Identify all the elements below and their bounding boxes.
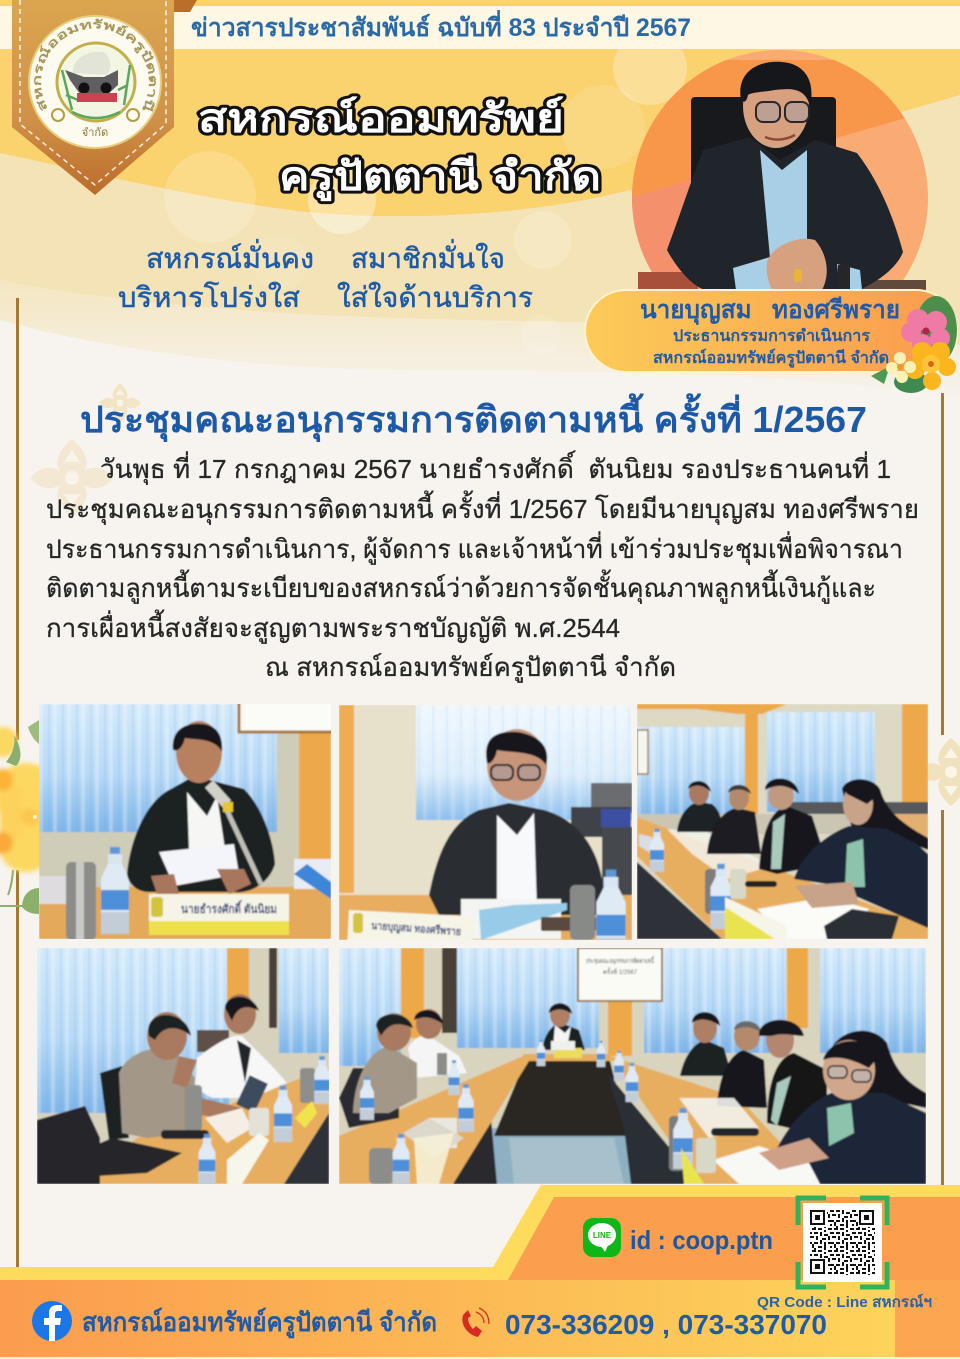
- icon: LINE: LINE: [593, 1231, 612, 1240]
- floor and centre table front: [439, 1061, 700, 1184]
- decorative bubbles: [164, 31, 687, 355]
- QR caption: QR Code : Line สหกรณ์ฯ: [757, 1293, 932, 1311]
- name plate: นายบุญสม ทองศรีพราย: [640, 296, 900, 326]
- slogans: สหกรณ์มั่นคง: [146, 239, 314, 274]
- tables: [339, 1056, 529, 1184]
- slogans: [118, 239, 533, 313]
- photo 2: chairman at table: นายบุญสม ทองศรีพราย: [371, 919, 461, 939]
- body text: ติดตามลูกหนี้ตามระเบียบของสหกรณ์ว่าด้วยการจัดชั้นคุณภาพลูกหนี้เงินกู้และ: [46, 569, 876, 604]
- organization title: [198, 96, 601, 201]
- slogans: สมาชิกมั่นใจ: [351, 239, 505, 274]
- organization title: สหกรณ์ออมทรัพย์: [198, 96, 564, 141]
- newsletter issue line: ข่าวสารประชาสัมพันธ์ ฉบับที่ 83 ประจำปี 2567: [191, 10, 691, 42]
- decorative yellow flower on left margin: [0, 720, 58, 914]
- photo 5: full meeting room: ครั้งที่ 1/2567: [603, 966, 638, 976]
- QR code: [798, 1198, 887, 1287]
- person 4: [794, 779, 928, 928]
- slogans: บริหารโปร่งใส: [118, 281, 300, 313]
- ornaments: [31, 383, 960, 806]
- photo 3: committee members on the right side: [637, 704, 928, 939]
- photo 1: vice chairman speaking: นายธำรงศักดิ์ ตันนิยม: [181, 900, 277, 916]
- photo 4: two members at the table: [37, 948, 329, 1184]
- organization title: ครูปัตตานี จำกัด: [279, 155, 601, 201]
- body text: วันพุธ ที่ 17 กรกฎาคม 2567 นายธำรงศักดิ์ ตันนิยม รองประธานคนที่ 1: [100, 450, 891, 485]
- header band: [0, 0, 960, 49]
- icon: Facebook: [32, 1301, 72, 1341]
- photo 5: full meeting room: ประชุมคณะอนุกรรมการติดตามหนี้: [586, 956, 655, 965]
- body text: [46, 450, 919, 683]
- photo 1: vice chairman speaking: [39, 704, 331, 939]
- person 2: [707, 785, 761, 854]
- left members: [339, 1009, 467, 1128]
- body text: การเผื่อหนี้สงสัยจะสูญตามพระราชบัญญัติ พ.ศ.2544: [46, 609, 620, 644]
- LINE id: id : coop.ptn: [630, 1225, 773, 1255]
- body text: ณ สหกรณ์ออมทรัพย์ครูปัตตานี จำกัด: [265, 652, 676, 683]
- right members: [680, 1012, 827, 1128]
- front woman: [773, 1031, 926, 1184]
- footer shapes: [0, 1185, 960, 1357]
- body text: ประธานกรรมการดำเนินการ, ผู้จัดการ และเจ้าหน้าที่ เข้าร่วมประชุมเพื่อพิจารณา: [46, 531, 903, 565]
- phone numbers: 073-336209 , 073-337070: [505, 1309, 827, 1340]
- icon: cooperative seal: [28, 15, 162, 149]
- person 1: [677, 781, 723, 832]
- icon: phone: [462, 1308, 489, 1337]
- photo 2: chairman at table: [339, 705, 632, 940]
- ribbon with logo seal: [12, 0, 197, 195]
- slogans: ใส่ใจด้านบริการ: [337, 281, 533, 313]
- chairperson at head of table: [542, 1003, 585, 1058]
- main heading: ประชุมคณะอนุกรรมการติดตามหนี้ ครั้งที่ 1/2567: [80, 393, 867, 443]
- icon: cooperative seal: สหกรณ์ออมทรัพย์ครูปัตตานี: [34, 18, 156, 112]
- person 3: [759, 778, 821, 874]
- name plate: สหกรณ์ออมทรัพย์ครูปัตตานี จำกัด: [653, 348, 889, 369]
- photo 5: full meeting room: [339, 948, 926, 1184]
- icon: cooperative seal: จำกัด: [82, 127, 108, 139]
- name plate: [585, 290, 957, 372]
- icon: tropical flowers: [871, 296, 957, 393]
- name plate: ประธานกรรมการดำเนินการ: [673, 327, 870, 345]
- icon: LINE: [583, 1218, 621, 1257]
- body text: ประชุมคณะอนุกรรมการติดตามหนี้ ครั้งที่ 1/2567 โดยมีนายบุญสม ทองศรีพราย: [46, 490, 919, 525]
- border rails: [16, 298, 944, 1267]
- Facebook page name: สหกรณ์ออมทรัพย์ครูปัตตานี จำกัด: [82, 1307, 437, 1339]
- portrait: chairman: [632, 50, 928, 290]
